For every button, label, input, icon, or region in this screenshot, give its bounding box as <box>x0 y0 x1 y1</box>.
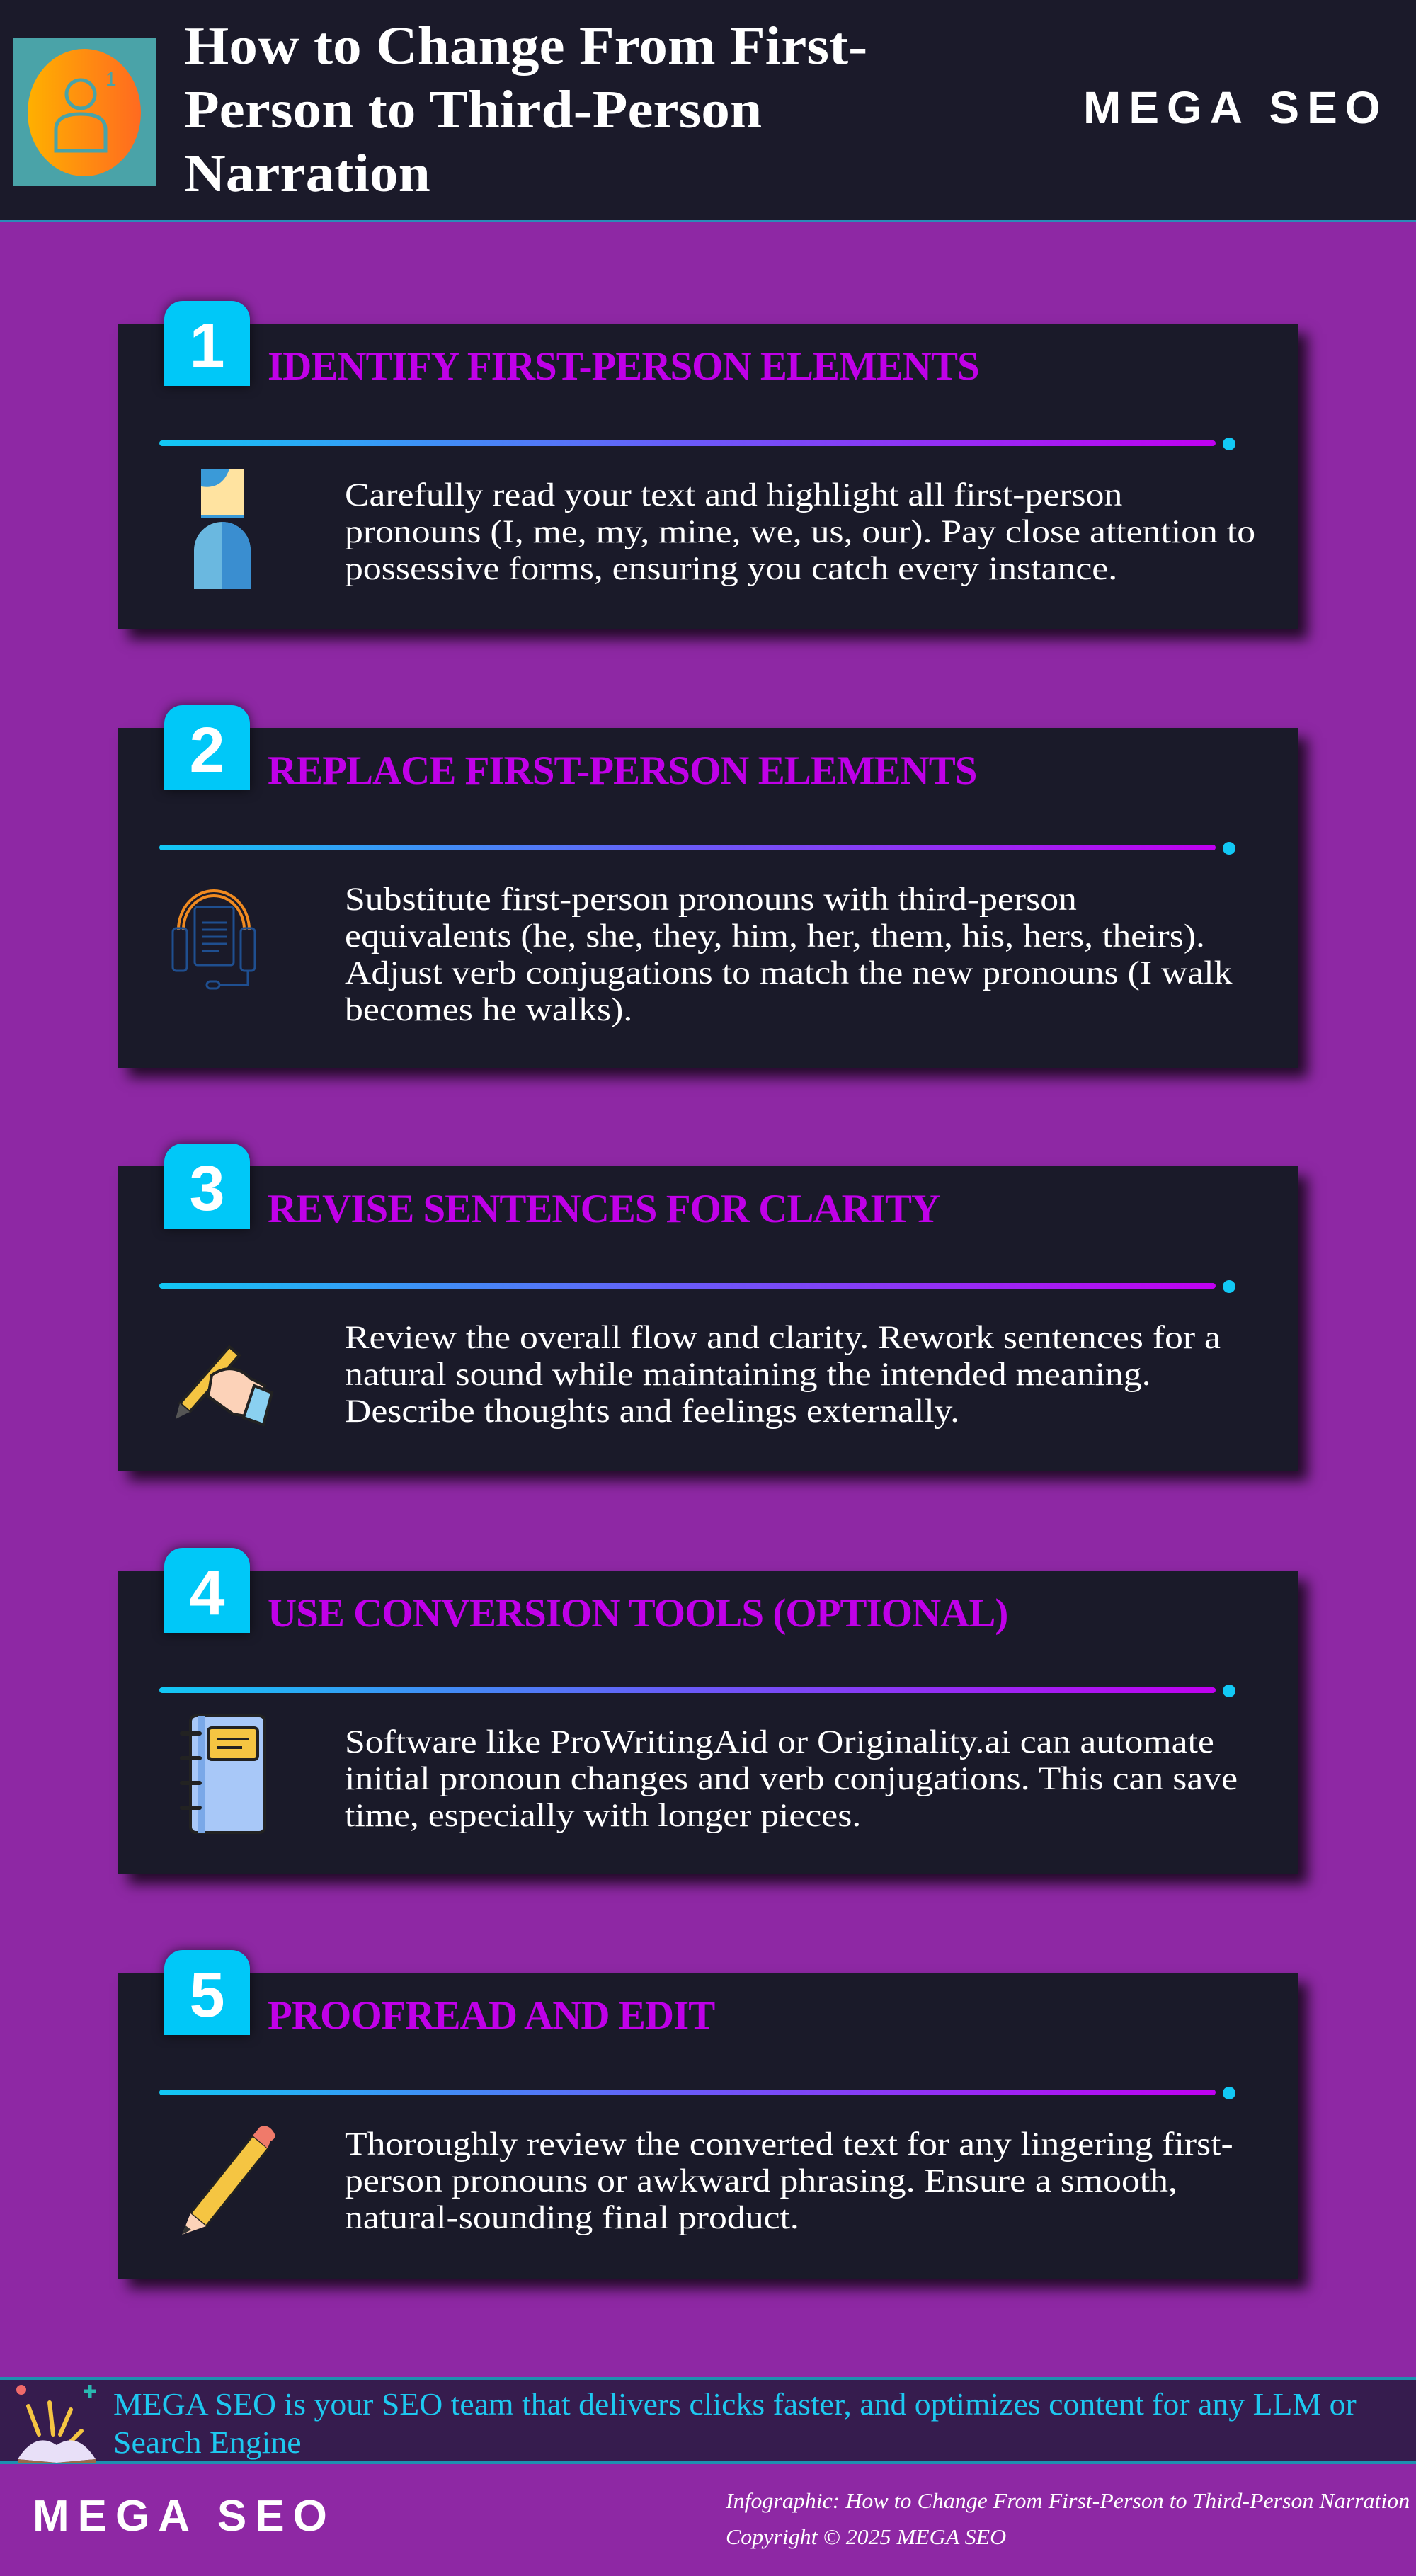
footer banner <box>0 2377 1416 2464</box>
icon: person badge: 1 <box>105 68 117 90</box>
title: How to Change From First- <box>184 16 867 76</box>
heading: IDENTIFY FIRST-PERSON ELEMENTS <box>268 344 979 389</box>
text: possessive forms, ensuring you catch every instance. <box>345 550 1117 587</box>
tagline: MEGA SEO is your SEO team that delivers clicks faster, and optimizes content for any LLM or <box>113 2387 1357 2422</box>
panel: step 1 <box>118 324 1298 629</box>
text: Describe thoughts and feelings externally. <box>345 1393 959 1430</box>
footer credits: Infographic: How to Change From First-Person to Third-Person Narration <box>726 2488 1410 2513</box>
text: equivalents (he, she, they, him, her, them, his, hers, theirs). <box>345 918 1205 954</box>
footer credits <box>725 2488 1410 2549</box>
text: Software like ProWritingAid or Originality.ai can automate <box>345 1723 1214 1760</box>
icon: headphones <box>171 889 256 990</box>
panel: step 4 <box>118 1571 1298 1874</box>
text: Thoroughly review the converted text for any lingering first- <box>345 2126 1233 2162</box>
text <box>345 1723 1238 1834</box>
text: Substitute first-person pronouns with third-person <box>345 881 1077 918</box>
icon: person badge <box>13 38 156 186</box>
number 5 <box>164 1950 250 2035</box>
text: Adjust verb conjugations to match the new pronouns (I walk <box>345 954 1232 991</box>
number 3: 3 <box>189 1153 225 1224</box>
heading: PROOFREAD AND EDIT <box>268 1993 714 2038</box>
panel: step 2 <box>118 728 1298 1068</box>
heading: USE CONVERSION TOOLS (OPTIONAL) <box>268 1591 1007 1636</box>
footer logo: MEGA SEO <box>33 2492 336 2541</box>
icon: hand writing <box>176 1348 270 1423</box>
number 4 <box>164 1548 250 1633</box>
number 2: 2 <box>189 715 225 786</box>
heading: REVISE SENTENCES FOR CLARITY <box>268 1187 940 1231</box>
title: Narration <box>184 144 430 203</box>
text: natural sound while maintaining the intended meaning. <box>345 1356 1151 1393</box>
text: Carefully read your text and highlight all first-person <box>345 477 1122 513</box>
logo: MEGA SEO <box>1083 82 1388 133</box>
icon: notebook <box>192 1716 263 1833</box>
icon: person <box>194 469 251 589</box>
text: person pronouns or awkward phrasing. Ensure a smooth, <box>345 2162 1177 2199</box>
icon: pencil <box>182 2126 275 2235</box>
number 3 <box>164 1144 250 1229</box>
icon: book with sparks <box>16 2385 96 2463</box>
text <box>345 2126 1233 2236</box>
header <box>0 0 1416 222</box>
text <box>345 1319 1221 1430</box>
title <box>184 16 867 203</box>
text <box>345 477 1255 587</box>
number 4: 4 <box>189 1558 225 1629</box>
footer credits: Copyright © 2025 MEGA SEO <box>726 2524 1006 2549</box>
text: initial pronoun changes and verb conjugations. This can save <box>345 1760 1238 1797</box>
text: becomes he walks). <box>345 991 632 1028</box>
tagline <box>113 2387 1357 2460</box>
text: Review the overall flow and clarity. Rework sentences for a <box>345 1319 1221 1356</box>
tagline: Search Engine <box>113 2425 302 2460</box>
number 2 <box>164 705 250 790</box>
text <box>345 881 1232 1028</box>
number 1: 1 <box>189 311 225 382</box>
panel: step 3 <box>118 1166 1298 1471</box>
panel: step 5 <box>118 1973 1298 2279</box>
text: pronouns (I, me, my, mine, we, us, our). Pay close attention to <box>345 513 1255 550</box>
heading: REPLACE FIRST-PERSON ELEMENTS <box>268 748 976 793</box>
title: Person to Third-Person <box>184 80 762 139</box>
text: time, especially with longer pieces. <box>345 1797 861 1834</box>
text: natural-sounding final product. <box>345 2199 799 2236</box>
number 1 <box>164 301 250 386</box>
number 5: 5 <box>189 1960 225 2031</box>
